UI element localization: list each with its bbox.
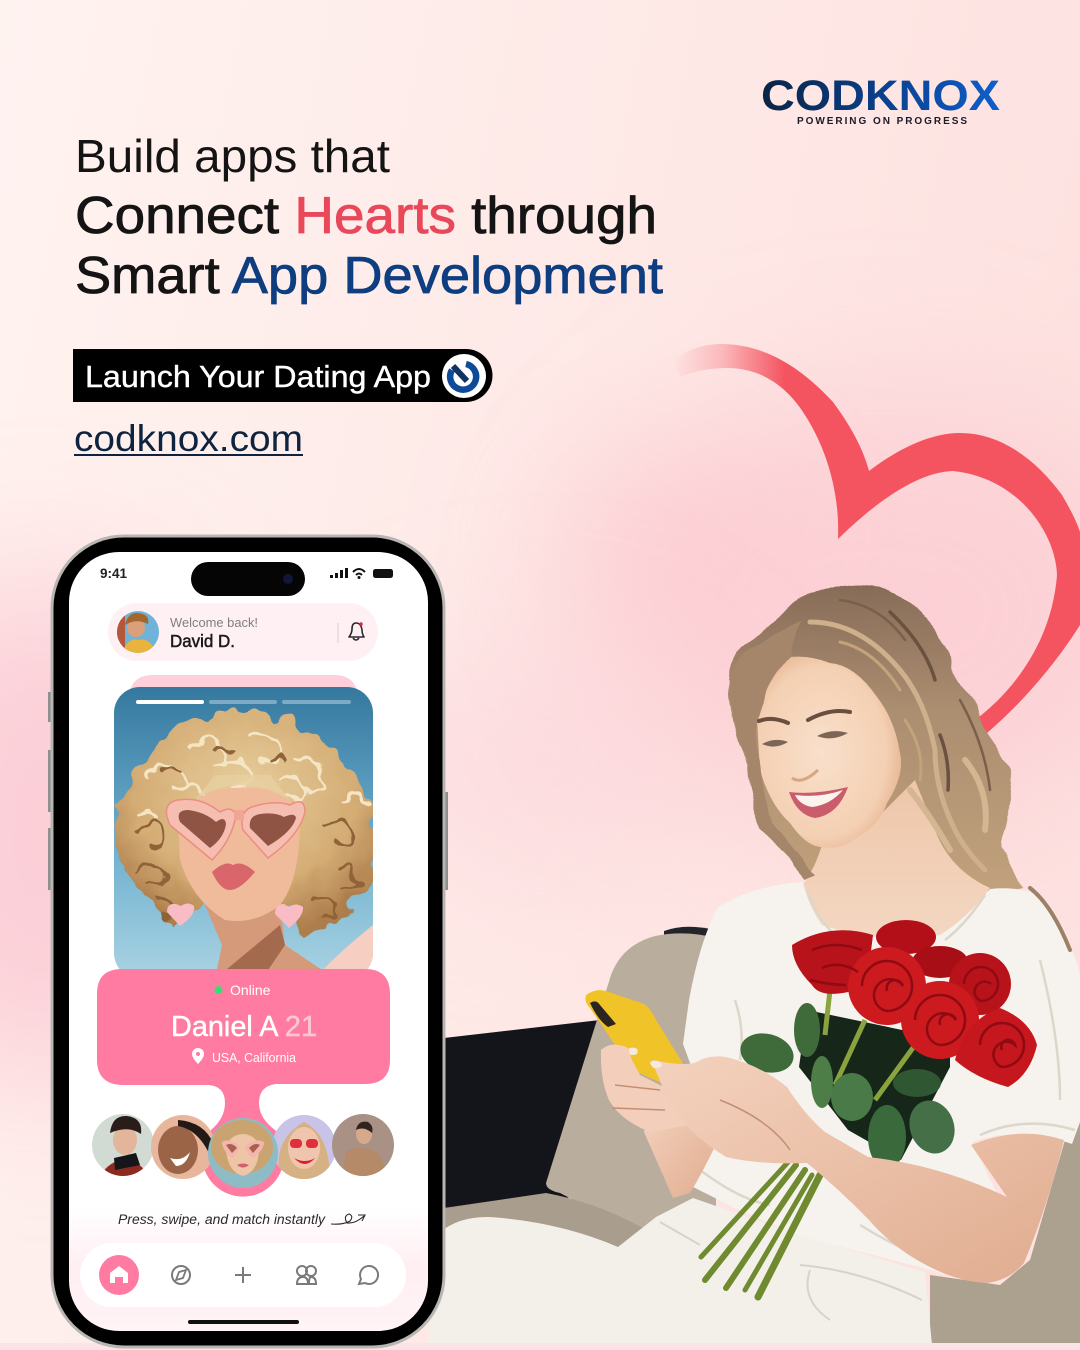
welcome bar (108, 603, 378, 661)
side hair left (730, 622, 815, 880)
headline: Build apps that (75, 130, 390, 182)
hair tail over shoulder (1030, 888, 1070, 950)
hair back (727, 582, 1027, 895)
icon: notification bell (349, 622, 364, 640)
call to action button: Launch Your Dating App (85, 359, 431, 394)
dynamic island (191, 562, 305, 596)
avatar 3 selected (208, 1118, 278, 1188)
roses (792, 920, 1037, 1087)
trousers (428, 1198, 932, 1345)
avatar 4 (272, 1115, 336, 1179)
neck (205, 905, 320, 969)
match avatars (92, 1114, 394, 1188)
welcome bar: David D. (170, 631, 235, 651)
phone body (52, 536, 444, 1347)
bouquet stems (701, 1160, 820, 1297)
phone screen (69, 552, 428, 1331)
icon: home (99, 1255, 139, 1295)
location: USA, California (212, 1050, 297, 1065)
main profile photo (114, 687, 376, 979)
avatar 2 (151, 1115, 215, 1179)
blouse (683, 882, 1080, 1278)
user avatar (117, 611, 159, 653)
avatar 1 (92, 1114, 154, 1176)
caption: Press, swipe, and match instantly (118, 1212, 326, 1227)
call to action button (73, 349, 492, 402)
headline (75, 130, 664, 305)
headline: Smart App Development (75, 247, 664, 305)
profile name: Daniel A 21 (171, 1011, 317, 1043)
bouquet leaves (740, 994, 955, 1162)
dress (315, 925, 373, 979)
icon: squiggle arrow (331, 1214, 365, 1224)
welcome bar: Welcome back! (170, 615, 258, 630)
woman on sofa photo (428, 582, 1080, 1345)
side buttons (48, 692, 448, 890)
avatar 5 (332, 1114, 394, 1176)
neck and chest (803, 780, 990, 945)
headline: Connect Hearts through (75, 187, 657, 245)
hands and arms (601, 1044, 1064, 1283)
icon: logo dial (442, 354, 486, 398)
hair strands (790, 600, 990, 870)
icon: plus (235, 1267, 251, 1283)
heart sunglasses (166, 799, 305, 860)
icon: chat (359, 1266, 378, 1284)
phone mockup (48, 536, 448, 1347)
face (178, 788, 300, 921)
heart outline (673, 344, 1080, 733)
heart earrings (167, 904, 194, 926)
sofa (444, 927, 1080, 1345)
logo: CODKNOX (761, 72, 1000, 120)
smile (789, 787, 848, 818)
pink profile card (97, 969, 390, 1197)
yellow phone (586, 990, 684, 1083)
lips (212, 864, 255, 890)
icon: compass (172, 1266, 190, 1284)
progress bars (136, 700, 351, 704)
card stack edge (130, 675, 357, 690)
online status: Online (230, 982, 271, 998)
home indicator (188, 1320, 299, 1324)
icon: people (297, 1266, 316, 1284)
location (192, 1048, 297, 1065)
face (730, 600, 990, 880)
status bar: 9:41 (100, 566, 128, 581)
eyes (759, 711, 850, 723)
bottom navigation (80, 1243, 406, 1307)
status bar (100, 566, 393, 581)
website link: codknox.com (74, 418, 303, 459)
curly hair (114, 714, 376, 935)
logo: POWERING ON PROGRESS (797, 116, 967, 127)
nose (792, 770, 818, 780)
